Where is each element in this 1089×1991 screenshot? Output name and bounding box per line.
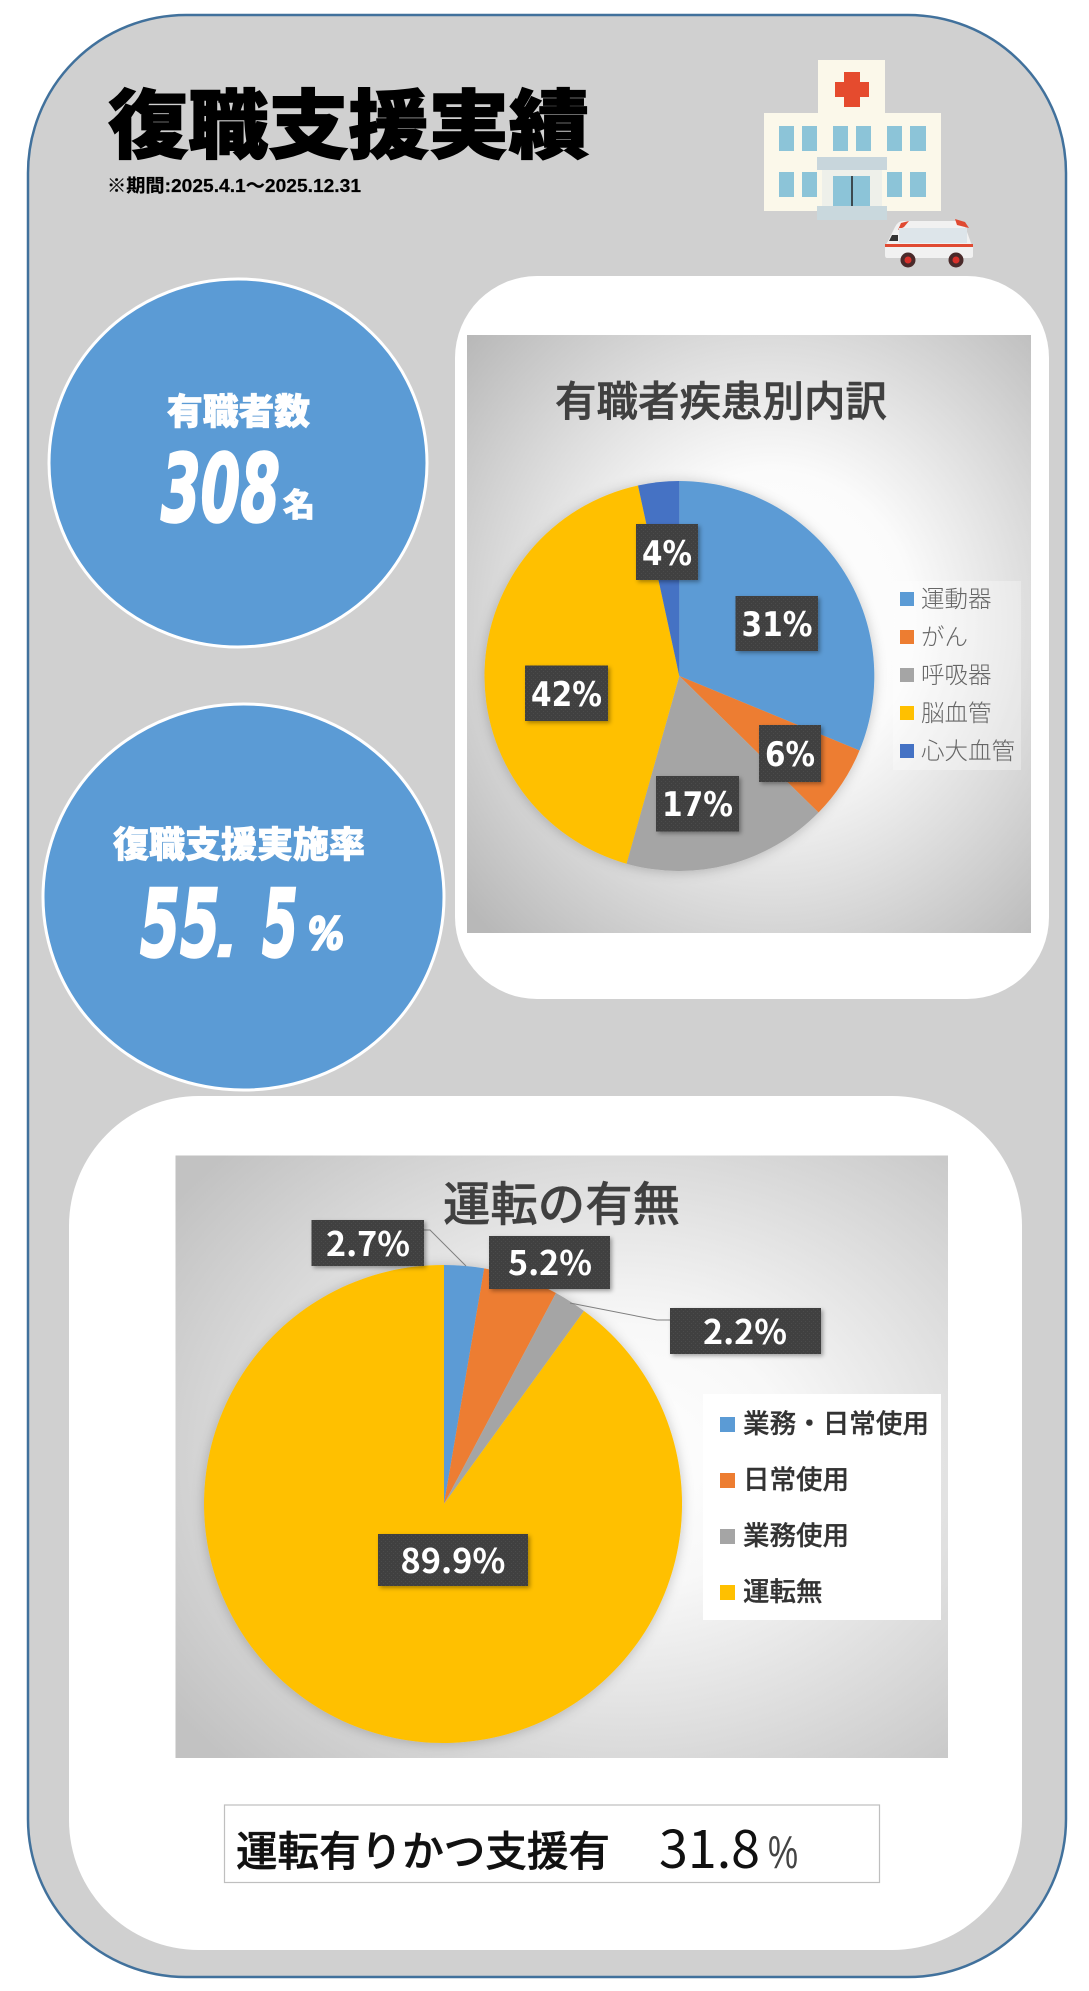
- label: 復職支援実施率: 復職支援実施率: [113, 816, 365, 868]
- data label: 31%: [736, 596, 818, 651]
- circle: 有職者数: [49, 279, 427, 647]
- circle: 復職支援実施率: [43, 704, 444, 1090]
- data label: 89.9%: 89.9%: [400, 1534, 506, 1583]
- data label: 31%: 31%: [742, 605, 812, 645]
- data label: 17%: [656, 776, 739, 832]
- legend: driving: 日常使用: [743, 1458, 849, 1497]
- legend: driving: [703, 1394, 941, 1620]
- title: 復職支援実績: [108, 65, 589, 174]
- unit: percent: %: [308, 909, 344, 960]
- legend: disease: 運動器: [921, 580, 992, 614]
- data label: 6%: 6%: [765, 735, 815, 775]
- icon: hospital: [764, 60, 941, 220]
- chart title: 運転の有無: [443, 1166, 680, 1235]
- data label: 2.2%: [670, 1305, 821, 1354]
- leader lines: [424, 1230, 670, 1320]
- data label: 89.9%: [378, 1534, 528, 1586]
- data label: 4%: [636, 524, 698, 580]
- unit: 名: 名: [283, 480, 315, 526]
- data label: 17%: 17%: [662, 785, 733, 825]
- legend: disease: がん: [921, 618, 968, 652]
- callout: 運転有りかつ支援有 31.8%: 31.8: [659, 1808, 760, 1883]
- legend: driving: 運転無: [743, 1570, 822, 1609]
- value: 55.5: .: [216, 905, 237, 970]
- data label: 42%: [525, 666, 608, 721]
- data label: 6%: [759, 725, 821, 782]
- value: 55.5: 5: [262, 870, 298, 979]
- callout: 運転有りかつ支援有 31.8%: %: [768, 1826, 798, 1878]
- chart background: [467, 335, 1031, 933]
- value: 308名: 308: [161, 435, 280, 544]
- data label: 2.2%: 2.2%: [703, 1305, 787, 1354]
- legend: driving: 業務使用: [743, 1514, 849, 1553]
- label: 有職者数: 有職者数: [167, 383, 310, 435]
- legend: disease: [893, 580, 1021, 770]
- period note: ※期間:2025.4.1～2025.12.31: [107, 176, 361, 196]
- callout: 運転有りかつ支援有 31.8%: 運転有りかつ支援有: [236, 1818, 610, 1878]
- callout: 運転有りかつ支援有 31.8%: [224, 1805, 880, 1883]
- value: 55.5: 55: [140, 870, 220, 979]
- legend: disease: 心大血管: [921, 732, 1015, 766]
- panel: disease breakdown: [455, 276, 1049, 999]
- legend: disease: 脳血管: [921, 694, 992, 728]
- data label: 42%: 42%: [531, 675, 602, 715]
- data label: 5.2%: 5.2%: [508, 1236, 592, 1285]
- pie chart: driving: [204, 1265, 682, 1743]
- data label: 4%: 4%: [642, 534, 692, 574]
- panel: driving: [69, 1096, 1022, 1950]
- legend: disease: 呼吸器: [921, 656, 992, 690]
- data label: 5.2%: [489, 1236, 610, 1289]
- icon: ambulance: [885, 219, 973, 268]
- legend: driving: 業務・日常使用: [743, 1402, 929, 1441]
- data label: 2.7%: 2.7%: [326, 1217, 410, 1266]
- pie chart: disease: [484, 481, 874, 871]
- chart background: [176, 1156, 948, 1758]
- chart title: 有職者疾患別内訳: [555, 368, 887, 428]
